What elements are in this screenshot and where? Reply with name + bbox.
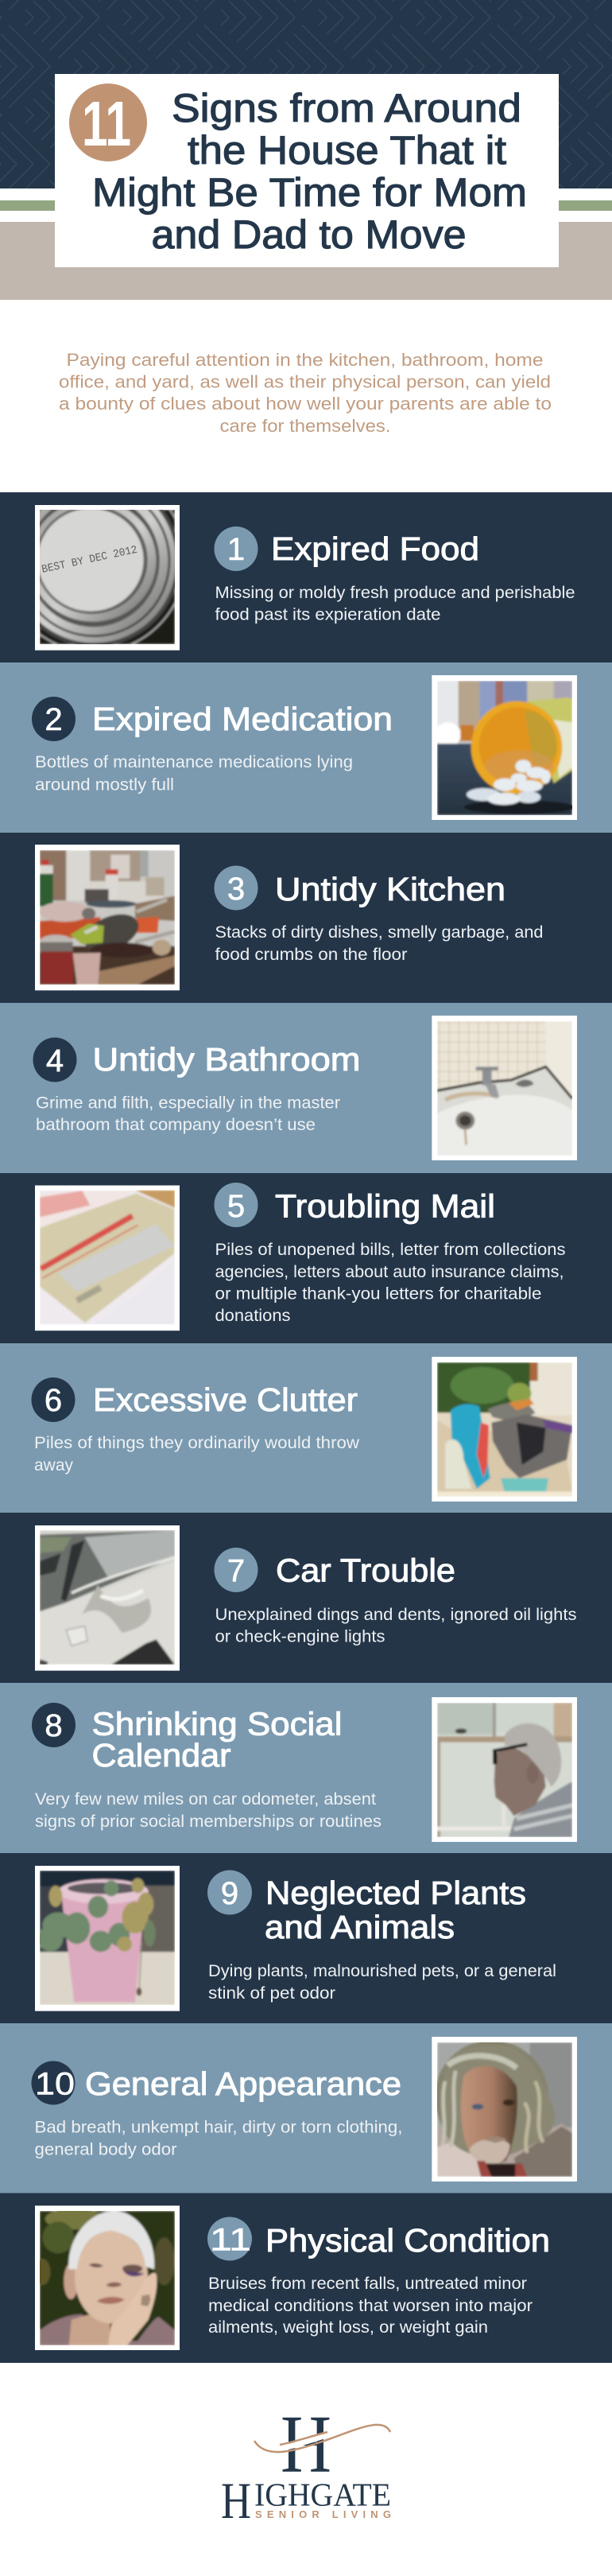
heading: Neglected Plants and Animals [265,1875,526,1945]
panel 8: shrinking social calendar [0,1683,612,1853]
description [34,1433,359,1474]
badge: 8 [32,1703,76,1747]
heading: Car Trouble: Car Trouble [276,1552,455,1589]
badge: 2 [32,697,76,741]
photo: dirty dishes [35,845,180,990]
photo: dented car [35,1525,180,1671]
heading: Untidy Bathroom: Untidy Bathroom [92,1041,361,1078]
description: donations [215,1306,291,1325]
description [35,2117,402,2158]
photo: dying plant [35,1866,180,2011]
description: ailments, weight loss, or weight gain [208,2318,488,2337]
badge: 11: 11 [210,2222,251,2257]
badge: 7 [215,1548,258,1592]
heading: Neglected Plants and Animals: and Animals [265,1909,455,1945]
intro text: a bounty of clues about how well your parents are able to [59,394,552,414]
photo: dirty tub [432,1016,577,1160]
description: around mostly full [35,775,174,794]
panel 10: general appearance [0,2023,612,2193]
photo: clothes pile [432,1357,577,1502]
heading: Expired Medication: Expired Medication [92,701,393,737]
badge: 9 [207,1871,252,1915]
badge: 6 [32,1377,75,1422]
title text: Might Be Time for Mom [92,170,527,215]
description: Grime and filth, especially in the master [36,1093,340,1112]
badge: 3 [215,865,258,910]
description [215,1240,566,1325]
badge: 3: 3 [227,872,245,907]
badge: 4: 4 [46,1043,64,1078]
wordmark [221,2473,391,2530]
heading: Troubling Mail: Troubling Mail [275,1188,495,1225]
panel 5: troubling mail [0,1173,612,1343]
photo: man at window [432,1697,577,1842]
description: or multiple thank-you letters for charitable [215,1284,542,1303]
badge: 8: 8 [45,1708,63,1743]
heading: Shrinking Social Calendar: Calendar [92,1737,230,1774]
intro text: office, and yard, as well as their physical person, can yield [59,372,551,391]
logo mark: H with swoosh: H [281,2399,331,2490]
description: medical conditions that worsen into major [208,2296,533,2315]
description [215,1605,577,1646]
header background [0,0,612,300]
title text [92,86,527,257]
description [208,1961,556,2003]
description: Dying plants, malnourished pets, or a general [208,1961,556,1980]
description: away [34,1455,73,1474]
heading: Shrinking Social Calendar: Shrinking Social [92,1705,342,1742]
badge: 4 [33,1037,76,1082]
description: Missing or moldy fresh produce and perishable [215,583,575,602]
title text: and Dad to Move [151,212,466,257]
panel 6: excessive clutter [0,1343,612,1513]
badge: 11 [207,2217,252,2260]
photo: final notice envelope [35,1185,180,1331]
description [35,1789,382,1831]
panel 4: untidy bathroom [0,1003,612,1173]
intro text: Paying careful attention in the kitchen, bathroom, home [67,350,544,370]
title panel [55,74,559,267]
wordmark: IGHGATE [254,2477,391,2513]
intro text [59,350,552,436]
badge: 10: 10 [35,2066,75,2101]
panel 9: neglected plants and animals [0,1853,612,2023]
panel 11: physical condition [0,2193,612,2363]
badge: 7: 7 [227,1554,245,1589]
photo: bruised woman [34,2205,180,2350]
badge: 2: 2 [45,702,63,737]
panel 2: expired medication [0,662,612,833]
description: Piles of things they ordinarily would throw [34,1433,359,1452]
description: Very few new miles on car odometer, absent [35,1789,376,1809]
logo: Highgate Senior Living [221,2399,393,2530]
description: Stacks of dirty dishes, smelly garbage, and [215,923,544,942]
wordmark: SENIOR LIVING [255,2508,391,2520]
description: general body odor [35,2139,176,2158]
heading: Excessive Clutter: Excessive Clutter [93,1381,358,1418]
badge: 1 [215,526,258,571]
title text: Signs from Around [172,86,521,130]
description: Bruises from recent falls, untreated minor [208,2274,527,2293]
heading: Physical Condition: Physical Condition [265,2222,550,2259]
description: food crumbs on the floor [215,945,407,964]
title text: the House That it [188,128,506,173]
description [215,923,544,964]
description [36,1093,340,1134]
heading: Expired Food: Expired Food [271,530,479,567]
panel 3: untidy kitchen [0,833,612,1003]
description: stink of pet odor [208,1983,335,2003]
description [215,583,575,624]
heading: Untidy Kitchen: Untidy Kitchen [275,871,505,907]
logo mark: H with swoosh [254,2399,393,2490]
badge: 5: 5 [227,1189,245,1224]
description: Piles of unopened bills, letter from collections [215,1240,566,1259]
heading: Neglected Plants and Animals: Neglected Plants [265,1875,526,1911]
photo: unkempt man [432,2037,577,2182]
heading: General Appearance: General Appearance [85,2065,401,2102]
description: or check-engine lights [215,1627,385,1646]
badge: 1: 1 [227,532,245,567]
description: Bad breath, unkempt hair, dirty or torn clothing, [35,2117,402,2136]
description: agencies, letters about auto insurance claims, [215,1262,564,1281]
badge: 11: 11 [82,88,131,159]
description: Unexplained dings and dents, ignored oil lights [215,1605,577,1624]
description [35,752,353,794]
description: Bottles of maintenance medications lying [35,752,353,771]
badge: 6: 6 [45,1383,62,1418]
photo: pill bottle [432,675,577,820]
photo: can lid [35,505,180,651]
description: food past its expieration date [215,604,440,624]
intro text: care for themselves. [219,416,391,436]
label on can: BEST BY DEC 2012 [41,544,138,577]
panel 7: car trouble [0,1513,612,1683]
description: bathroom that company doesn’t use [36,1115,316,1134]
badge: 9: 9 [221,1876,238,1911]
wordmark: H [221,2473,251,2530]
badge: 10 [32,2061,75,2104]
badge: 5 [215,1183,258,1227]
description: signs of prior social memberships or routines [35,1812,382,1831]
heading: Shrinking Social Calendar [92,1705,342,1774]
panel 1: expired food [0,492,612,662]
description [208,2274,533,2337]
